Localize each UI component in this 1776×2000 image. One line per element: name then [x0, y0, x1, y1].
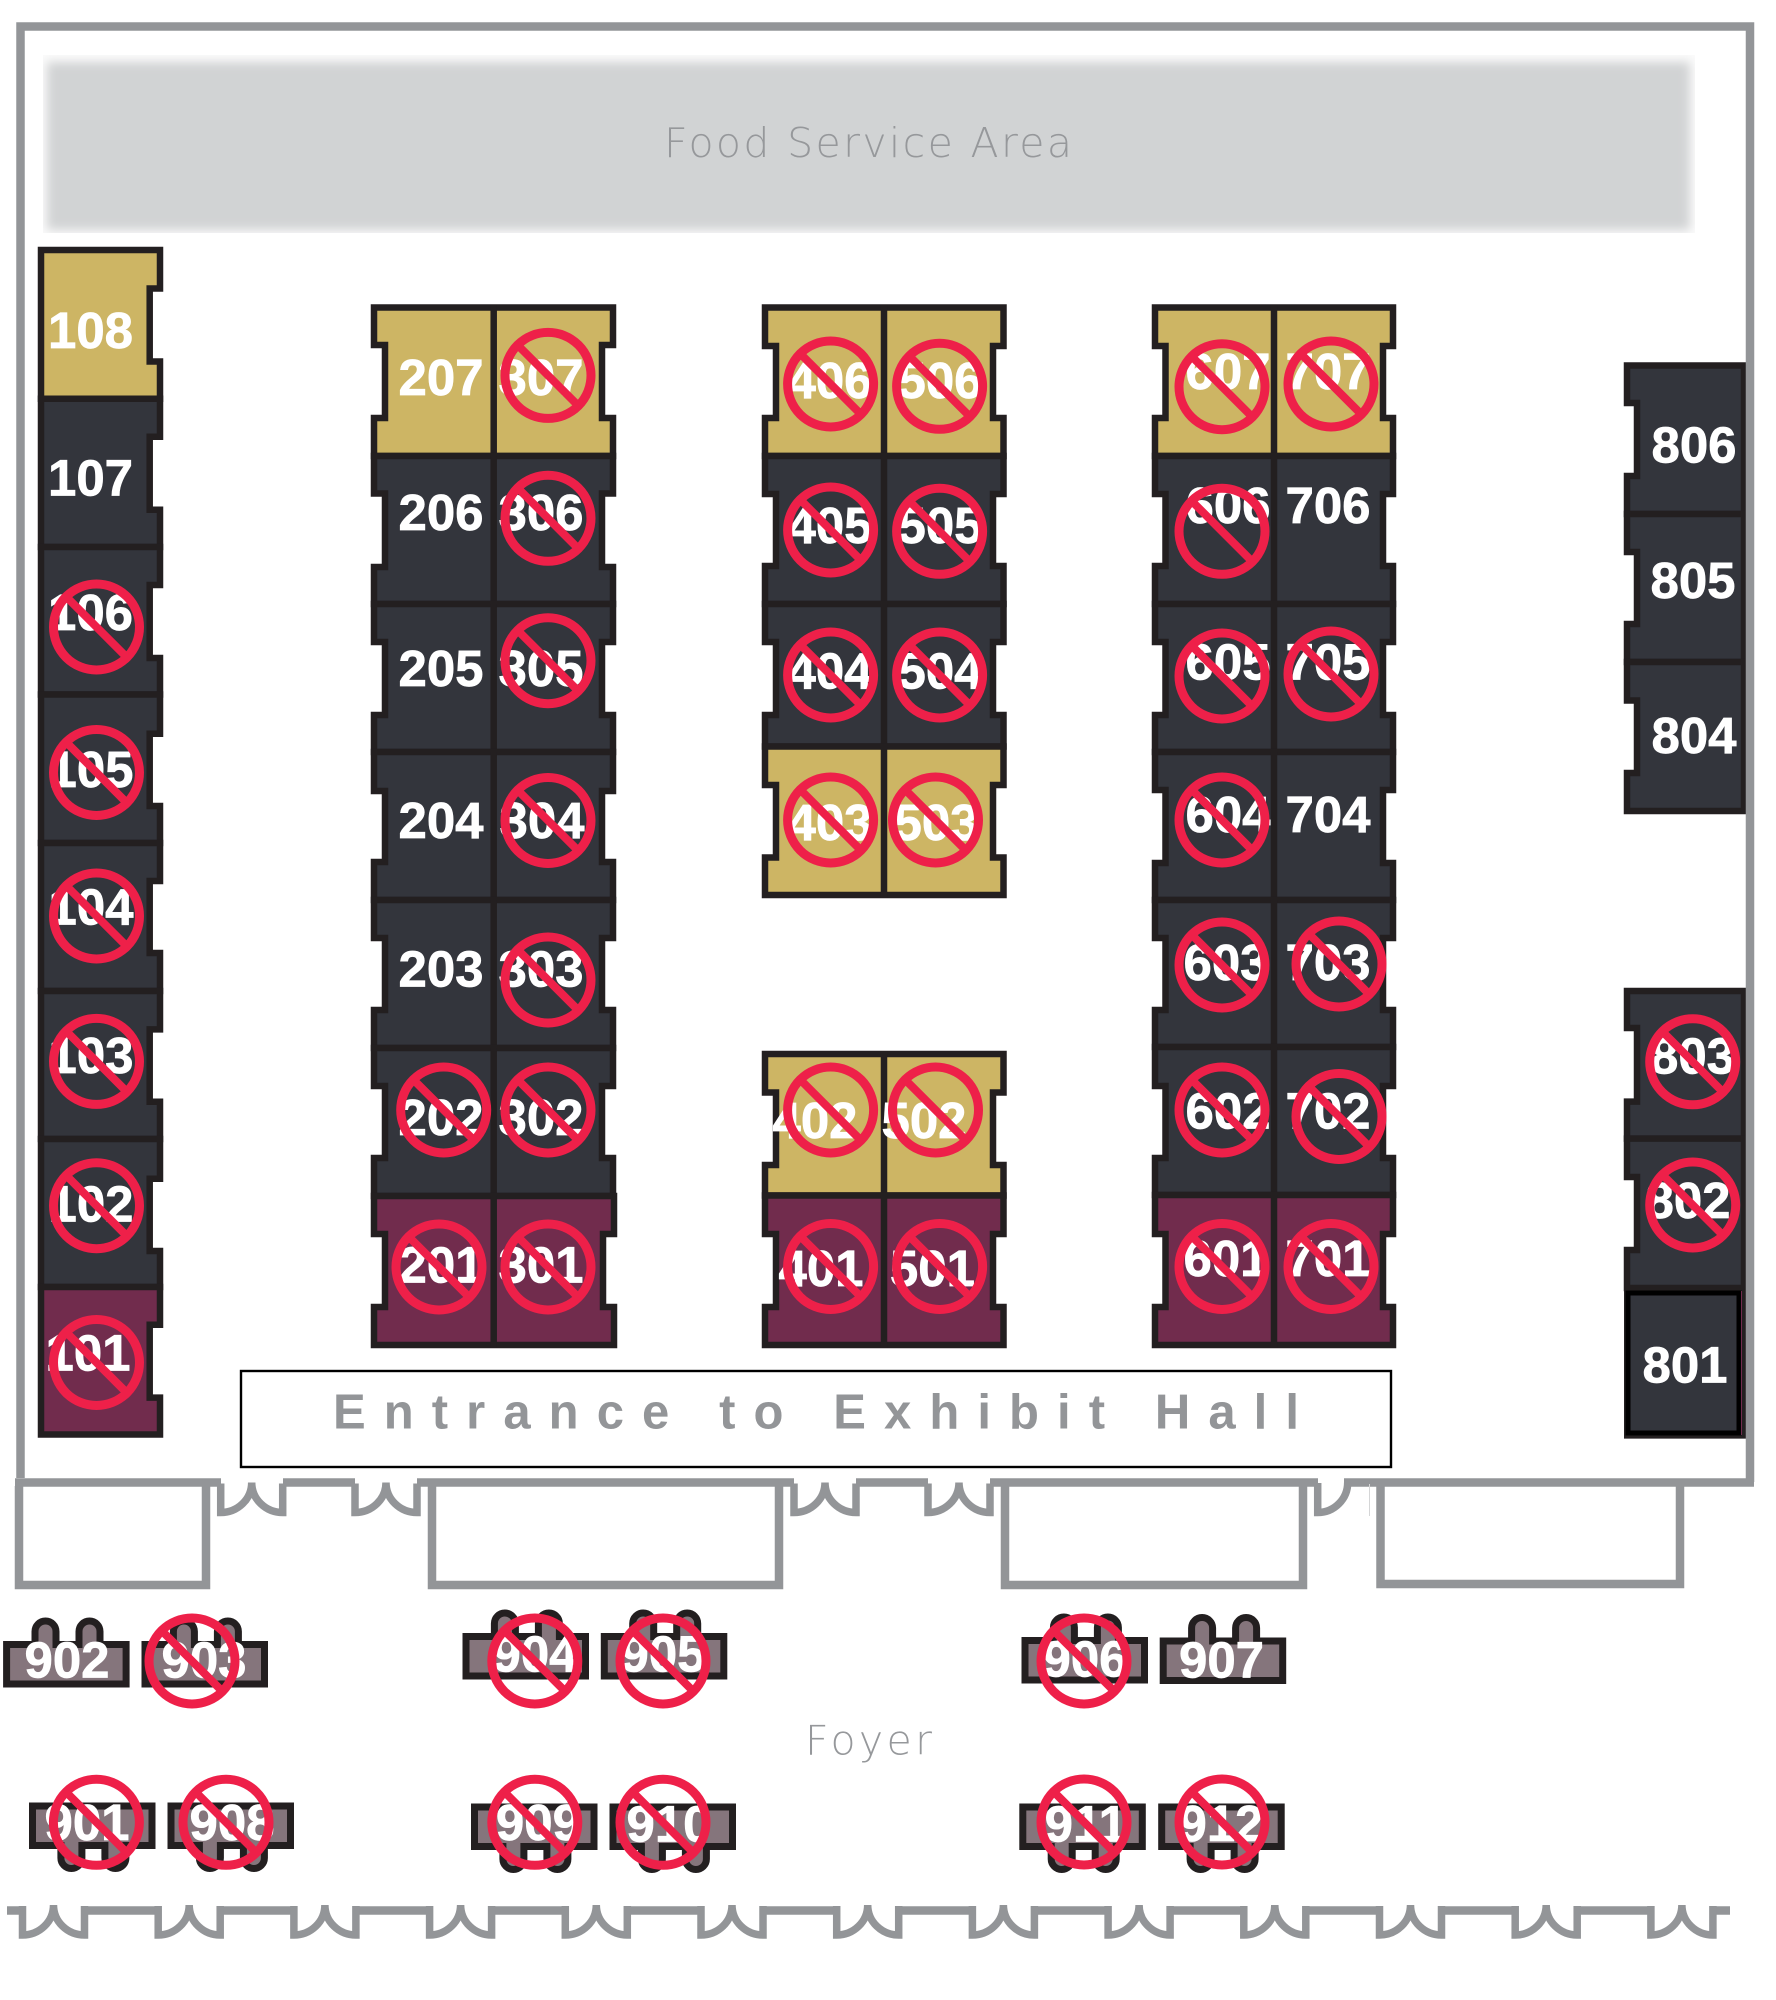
- booths 403 and 503: 403: [787, 794, 873, 851]
- food service area: [43, 55, 1695, 233]
- booths 204 and 304: 204: [398, 792, 484, 849]
- booth 801: [1624, 1288, 1746, 1439]
- booths 603 and 703: 603: [1183, 934, 1269, 991]
- booths 406 and 506: 506: [897, 352, 983, 409]
- booth 106: 106: [48, 584, 133, 641]
- kiosk 912: [1162, 1779, 1281, 1870]
- booth 806: 806: [1651, 416, 1737, 474]
- booths 401 and 501: [765, 1196, 1004, 1348]
- booths 202 and 302: 202: [398, 1089, 484, 1146]
- booth 806: [1627, 366, 1744, 514]
- booth 101: [41, 1287, 160, 1434]
- booths 403 and 503: 503: [893, 794, 979, 851]
- booth 102: [41, 1139, 160, 1287]
- kiosk 904: [466, 1613, 586, 1704]
- booths 404 and 504: [765, 604, 1004, 746]
- foyer south wall: [7, 1906, 1730, 1915]
- booths 403 and 503: [765, 746, 1004, 898]
- booth 103: [41, 991, 160, 1139]
- double doors to foyer: [221, 1482, 1348, 1512]
- booths 204 and 304: 304: [499, 792, 585, 849]
- booths 207 and 307: [374, 305, 613, 456]
- kiosk 902: [7, 1621, 126, 1689]
- booths 203 and 303: 203: [398, 941, 484, 998]
- food service area label: Food Service Area: [664, 119, 1072, 167]
- kiosk 911: 911: [1045, 1796, 1127, 1852]
- booths 207 and 307: 307: [498, 349, 584, 406]
- booths 603 and 703: [1155, 900, 1393, 1047]
- booths 605 and 705: [1155, 604, 1393, 752]
- booths 601 and 701: 601: [1183, 1230, 1269, 1287]
- booths 203 and 303: 303: [498, 941, 584, 998]
- entrance banner: [241, 1371, 1391, 1467]
- booth columns 600 and 700: [1155, 305, 1393, 1348]
- kiosk 907: [1163, 1618, 1283, 1689]
- booths 602 and 702: 702: [1285, 1083, 1371, 1140]
- booths 405 and 505: 405: [787, 497, 873, 554]
- booth column 100: [41, 250, 160, 1434]
- booths 401 and 501: 401: [778, 1240, 864, 1297]
- booths 601 and 701: [1155, 1195, 1393, 1348]
- booth 102: 102: [48, 1175, 134, 1232]
- foyer south doors: [22, 1905, 1713, 1935]
- booth 802: [1627, 1139, 1744, 1288]
- booths 606 and 706: 706: [1285, 477, 1371, 534]
- booth 803: [1627, 991, 1744, 1139]
- booths 605 and 705: 705: [1285, 634, 1371, 690]
- booths 606 and 706: 606: [1185, 477, 1271, 534]
- kiosk 909: [474, 1779, 594, 1870]
- booths 402 and 502: [765, 1051, 1004, 1196]
- kiosk 912: 912: [1178, 1795, 1264, 1852]
- booths 601 and 701: 701: [1285, 1230, 1371, 1287]
- booths 603 and 703: 703: [1285, 934, 1371, 991]
- kiosk 901: [32, 1779, 152, 1868]
- booths 406 and 506: [765, 305, 1004, 456]
- booth 805: [1627, 514, 1744, 662]
- kiosk 905: 905: [620, 1626, 706, 1683]
- booths 203 and 303: [374, 900, 613, 1048]
- booths 402 and 502: 402: [772, 1092, 858, 1149]
- booths 602 and 702: [1155, 1047, 1393, 1195]
- booths 606 and 706: [1155, 456, 1393, 604]
- kiosk 906: [1025, 1617, 1144, 1704]
- booths 604 and 704: 604: [1185, 786, 1271, 843]
- foyer label: Foyer: [805, 1716, 932, 1764]
- booths 204 and 304: [374, 752, 613, 900]
- booth 106: [41, 547, 160, 694]
- kiosk 901: 901: [44, 1794, 130, 1851]
- hall south wall: [15, 1478, 1754, 1487]
- booth 803: 803: [1650, 1028, 1735, 1084]
- booths 604 and 704: [1155, 752, 1393, 900]
- booth 801: 801: [1642, 1336, 1728, 1394]
- booths 404 and 504: 404: [787, 642, 873, 700]
- booth 805: 805: [1650, 552, 1736, 609]
- kiosk 906: 906: [1042, 1631, 1128, 1688]
- booths 602 and 702: 602: [1185, 1083, 1271, 1140]
- booths 206 and 306: 306: [498, 484, 584, 541]
- kiosk 908: 908: [189, 1794, 275, 1851]
- exhibit hall outer wall: [20, 26, 1750, 1482]
- room below hall 2: [432, 1486, 779, 1585]
- kiosk 910: [613, 1779, 732, 1870]
- booths 202 and 302: 302: [498, 1089, 584, 1146]
- entrance label: Entrance to Exhibit Hall: [333, 1386, 1299, 1440]
- booth column 800 lower: [1624, 991, 1746, 1439]
- booths 604 and 704: 704: [1285, 786, 1371, 843]
- booth 103: 103: [48, 1027, 134, 1084]
- booths 201 and 301: 201: [398, 1237, 484, 1294]
- booth columns 200 and 300: [374, 305, 614, 1348]
- booths 206 and 306: [374, 456, 613, 604]
- room below hall 3: [1005, 1486, 1303, 1585]
- booth 104: [41, 843, 160, 991]
- kiosk 910: 910: [626, 1796, 712, 1852]
- booths 607 and 707: 607: [1185, 343, 1271, 400]
- booth 108: 108: [48, 302, 133, 359]
- kiosk 905: [604, 1613, 724, 1704]
- booth 108: [41, 250, 160, 399]
- booths 207 and 307: 207: [398, 349, 484, 406]
- kiosk 902: 902: [24, 1632, 110, 1689]
- foyer kiosks upper row: [7, 1613, 1283, 1704]
- booth 105: 105: [48, 741, 134, 798]
- booths 404 and 504: 504: [897, 642, 983, 700]
- booth 804: 804: [1651, 707, 1737, 764]
- booths 202 and 302: [374, 1048, 613, 1196]
- booth 107: [41, 399, 160, 547]
- booths 607 and 707: 707: [1285, 343, 1371, 400]
- booths 402 and 502: 502: [881, 1092, 967, 1149]
- booth columns 400 and 500: [765, 305, 1004, 1348]
- booths 201 and 301: [374, 1196, 614, 1348]
- foyer kiosks lower row: [32, 1779, 1281, 1870]
- kiosk 903: [145, 1618, 264, 1704]
- kiosk 911: [1023, 1779, 1142, 1870]
- kiosk 903: 903: [161, 1632, 247, 1689]
- booths 205 and 305: 205: [398, 640, 484, 697]
- booth 802: 802: [1645, 1172, 1731, 1229]
- booth 105: [41, 694, 160, 843]
- booth column 800 upper: [1627, 366, 1744, 811]
- booth 804: [1627, 662, 1744, 811]
- booths 405 and 505: [765, 456, 1004, 604]
- booth 104: 104: [48, 879, 134, 936]
- booths 401 and 501: 501: [890, 1240, 975, 1297]
- single door to foyer: [1318, 1482, 1348, 1512]
- booths 405 and 505: 505: [897, 497, 983, 554]
- kiosk 907: 907: [1179, 1632, 1264, 1689]
- kiosk 904: 904: [492, 1626, 578, 1683]
- booths 406 and 506: 406: [787, 352, 873, 409]
- booth 101: 101: [45, 1324, 131, 1382]
- room below hall 1: [19, 1486, 206, 1585]
- booths 206 and 306: 206: [398, 484, 484, 541]
- booths 205 and 305: [374, 604, 613, 752]
- room below hall 4: [1380, 1484, 1680, 1584]
- booths 205 and 305: 305: [498, 640, 584, 697]
- booths 605 and 705: 605: [1185, 634, 1271, 690]
- kiosk 908: [171, 1779, 290, 1868]
- kiosk 909: 909: [496, 1794, 581, 1851]
- booths 607 and 707: [1155, 305, 1393, 456]
- booths 201 and 301: 301: [498, 1237, 584, 1294]
- booth 107: 107: [48, 450, 133, 506]
